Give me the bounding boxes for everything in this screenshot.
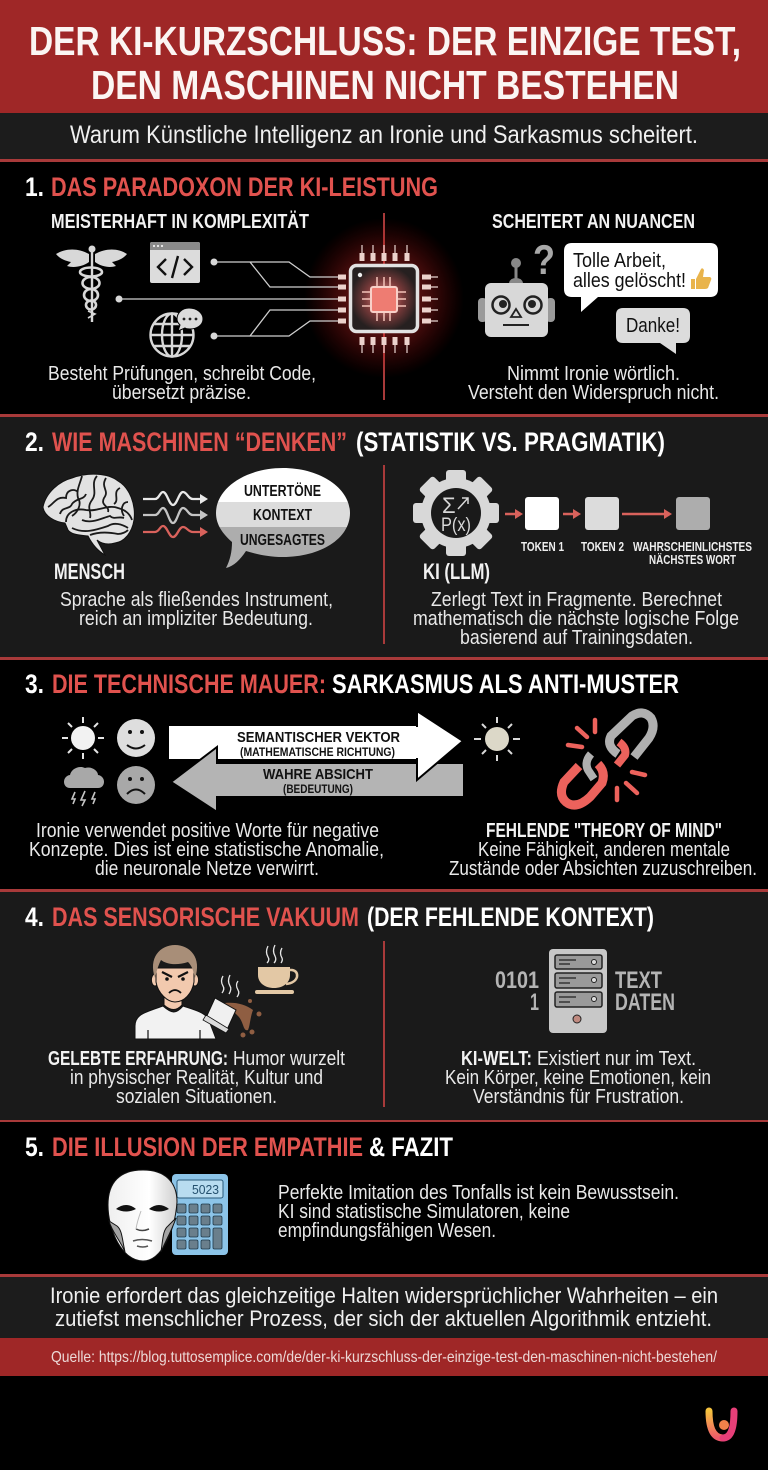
- arrows: semantic vector vs true intent: WAHRE ABSICHT: [263, 766, 373, 783]
- heading: section 1: 1.: [25, 172, 44, 202]
- text: AI world: KI-WELT:: [461, 1048, 532, 1070]
- panel: section 4 sensory vacuum: [0, 892, 768, 1120]
- text: empathy explanation: Perfekte Imitation des Tonfalls ist kein Bewusstsein.: [278, 1182, 679, 1204]
- text: lived experience: sozialen Situationen.: [116, 1086, 277, 1108]
- icon: brain: [43, 474, 134, 555]
- heading: section 5: DIE ILLUSION DER EMPATHIE: [52, 1132, 363, 1162]
- speech bubble: human subtext layers: KONTEXT: [253, 507, 312, 524]
- speech bubble: Tolle Arbeit: Tolle Arbeit,: [573, 250, 666, 272]
- icon: wavy arrows: [143, 492, 208, 537]
- panel: section 3 technical wall: [0, 660, 768, 889]
- text: human caption: reich an impliziter Bedeutung.: [79, 608, 313, 630]
- heading: section 1: DAS PARADOXON DER KI-LEISTUNG: [51, 172, 438, 202]
- heading: section 3: [25, 669, 679, 699]
- heading: section 4: DAS SENSORISCHE VAKUUM: [52, 902, 359, 932]
- icon: statistics gear: [413, 470, 499, 556]
- icon: sun neutral: [474, 717, 520, 761]
- icon: broken chain: [561, 713, 653, 805]
- icon: server with data labels: DATEN: [615, 989, 675, 1016]
- arrows: semantic vector vs true intent: (BEDEUTUNG): [283, 782, 353, 796]
- text: AI world: Verständnis für Frustration.: [473, 1086, 684, 1108]
- icon: statistics gear: P(x): [441, 515, 471, 536]
- conclusion bar: zutiefst menschlicher Prozess, der sich der aktuellen Algorithmik entzieht.: [55, 1306, 712, 1331]
- icon: server with data labels: TEXT: [615, 967, 662, 994]
- arrows: semantic vector vs true intent: (MATHEMATISCHE RICHTUNG): [240, 745, 395, 759]
- token flow diagram: TOKEN 1: [521, 539, 564, 554]
- text: AI world: Existiert nur im Text.: [537, 1048, 696, 1070]
- source bar: [0, 1338, 768, 1376]
- icon: storm cloud: [64, 767, 104, 806]
- panel: section 1 paradox: [0, 162, 768, 414]
- icon: logo: [709, 1411, 734, 1438]
- heading: section 5: & FAZIT: [369, 1132, 453, 1162]
- heading: section 2: 2.: [25, 427, 44, 457]
- conclusion bar: [0, 1277, 768, 1338]
- icon: code window: [150, 242, 200, 283]
- text: left caption: Besteht Prüfungen, schreibt Code,: [48, 363, 316, 385]
- heading: section 4: [25, 902, 654, 932]
- subtitle bar: [0, 113, 768, 159]
- icon: smiling face: [117, 719, 155, 757]
- text: AI caption: Zerlegt Text in Fragmente. Berechnet: [431, 589, 722, 611]
- text: theory of mind: [449, 820, 757, 880]
- token flow diagram: TOKEN 2: [581, 539, 624, 554]
- icon: thumbs up: [691, 268, 711, 289]
- icon: glowing chip with circuit traces: [116, 218, 464, 378]
- icon: mask: [108, 1170, 177, 1261]
- text: lived experience: in physischer Realität, Kultur und: [70, 1067, 323, 1089]
- text: AI world: [445, 1048, 711, 1108]
- text: empathy explanation: [278, 1182, 679, 1242]
- text: AI world: Kein Körper, keine Emotionen, kein: [445, 1067, 711, 1089]
- text: right caption: Nimmt Ironie wörtlich.: [507, 363, 680, 385]
- icon: confused robot: [478, 236, 555, 337]
- text: left caption: [48, 363, 316, 404]
- arrows: semantic vector vs true intent: SEMANTISCHER VEKTOR: [237, 729, 400, 746]
- text: lived experience: GELEBTE ERFAHRUNG:: [48, 1048, 228, 1070]
- heading: section 4: (DER FEHLENDE KONTEXT): [367, 902, 654, 932]
- heading: section 2: WIE MASCHINEN “DENKEN”: [52, 427, 347, 457]
- icon: calculator: 5023: [192, 1182, 219, 1197]
- heading: section 2: (STATISTIK VS. PRAGMATIK): [356, 427, 665, 457]
- text: irony explanation: Ironie verwendet positive Worte für negative: [36, 820, 379, 842]
- icon: server with data labels: [495, 949, 675, 1033]
- label: Mensch: MENSCH: [54, 559, 125, 584]
- panel: section 5 illusion of empathy: [0, 1122, 768, 1274]
- heading: section 3: DIE TECHNISCHE MAUER:: [52, 669, 326, 699]
- icon: angry person spilling coffee: [135, 945, 262, 1039]
- text: right caption: [468, 363, 719, 404]
- text: irony explanation: [29, 820, 384, 880]
- icon: steaming coffee cup: [255, 945, 297, 994]
- icon: server with data labels: 1: [530, 989, 539, 1016]
- subheading: masterful in complexity: MEISTERHAFT IN KOMPLEXITÄT: [51, 210, 309, 233]
- icon: sun: [62, 717, 104, 759]
- speech bubble: human subtext layers: [216, 468, 350, 568]
- text: human caption: [60, 589, 333, 630]
- text: right caption: Versteht den Widerspruch nicht.: [468, 382, 719, 404]
- speech bubble: Danke: [616, 308, 690, 354]
- token flow diagram: NÄCHSTES WORT: [649, 552, 736, 567]
- heading: section 4: 4.: [25, 902, 44, 932]
- icon: confused robot: ?: [533, 236, 555, 283]
- heading: section 2: [25, 427, 665, 457]
- label: KI (LLM): KI (LLM): [423, 559, 490, 584]
- icon: caduceus: [56, 246, 127, 322]
- icon: statistics gear: Σ: [442, 493, 456, 518]
- speech bubble: Danke: Danke!: [626, 315, 680, 337]
- subheading: fails at nuance: SCHEITERT AN NUANCEN: [492, 211, 695, 233]
- icon: frowning face: [117, 766, 155, 804]
- text: AI caption: basierend auf Trainingsdaten.: [460, 627, 693, 649]
- speech bubble: Tolle Arbeit: alles gelöscht!: [573, 270, 686, 292]
- conclusion bar: Ironie erfordert das gleichzeitige Halten widersprüchlicher Wahrheiten – ein: [50, 1283, 718, 1308]
- text: lived experience: [48, 1048, 345, 1108]
- text: empathy explanation: empfindungsfähigen Wesen.: [278, 1220, 496, 1242]
- icon: globe with chat bubble: [150, 308, 203, 357]
- icon: calculator: [172, 1174, 228, 1255]
- heading: section 5: 5.: [25, 1132, 44, 1162]
- heading: section 3: 3.: [25, 669, 44, 699]
- text: irony explanation: Konzepte. Dies ist eine statistische Anomalie,: [29, 839, 384, 861]
- heading: section 3: SARKASMUS ALS ANTI-MUSTER: [332, 669, 679, 699]
- speech bubble: human subtext layers: UNGESAGTES: [240, 532, 325, 549]
- speech bubble: human subtext layers: UNTERTÖNE: [244, 481, 321, 500]
- panel: section 2 how machines think: [0, 417, 768, 657]
- arrows: semantic vector vs true intent: [169, 711, 464, 812]
- title banner: [0, 0, 768, 113]
- text: AI caption: [413, 589, 739, 649]
- text: irony explanation: die neuronale Netze verwirrt.: [95, 858, 319, 880]
- subtitle bar: Warum Künstliche Intelligenz an Ironie und Sarkasmus scheitert.: [70, 121, 698, 149]
- text: empathy explanation: KI sind statistische Simulatoren, keine: [278, 1201, 570, 1223]
- text: human caption: Sprache als fließendes Instrument,: [60, 589, 333, 611]
- speech bubble: Tolle Arbeit: [564, 243, 718, 312]
- text: lived experience: Humor wurzelt: [233, 1048, 345, 1070]
- token flow diagram: [505, 497, 752, 567]
- icon: server with data labels: 0101: [495, 967, 539, 994]
- text: left caption: übersetzt präzise.: [112, 382, 251, 404]
